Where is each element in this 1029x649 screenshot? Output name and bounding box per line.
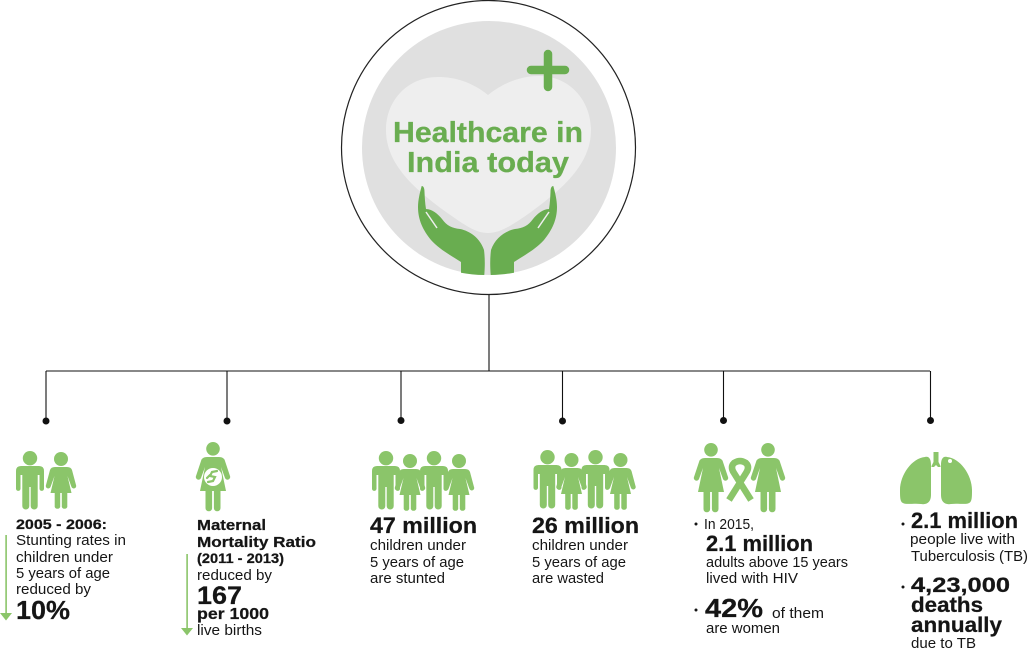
text: 26 million wasted [532,513,639,587]
icon: four children [372,451,474,511]
text: maternal mortality ratio: live births [197,623,262,639]
text: maternal mortality ratio: 167 [197,582,242,610]
text: 26 million wasted: 5 years of age [532,555,626,571]
panel: stunted children [370,451,477,587]
text: TB figures [902,508,1028,649]
text: stunting reduction: 10% [16,595,70,625]
text: 26 million wasted: 26 million [532,513,639,538]
title: India today [407,147,569,179]
text: stunting reduction: Stunting rates in [16,533,126,549]
text: HIV figures: 42% [705,593,763,623]
arrow: down [0,535,12,620]
emblem: Healthcare in India today [342,0,636,294]
text: 26 million wasted: are wasted [532,571,604,587]
text: TB figures: Tuberculosis (TB) [911,549,1028,565]
hand highlights [426,212,549,228]
text: stunting reduction: reduced by [16,582,92,598]
text: maternal mortality ratio: (2011 - 2013) [197,550,284,566]
text: TB figures: people live with [910,532,1015,548]
text: HIV figures: In 2015, [704,517,754,533]
grey disc [362,21,616,275]
icon: pregnant woman [196,442,230,511]
text: maternal mortality ratio: per 1000 [197,606,269,623]
text: TB figures: 2.1 million [911,508,1018,533]
text: stunting reduction [16,516,126,625]
text: 26 million wasted: children under [532,538,628,554]
text: 47 million stunted: children under [370,538,466,554]
text: 47 million stunted: 47 million [370,513,477,538]
text: HIV figures: adults above 15 years [706,555,848,571]
icon: plus [531,54,565,87]
icon: women with ribbon [694,443,785,512]
text: TB figures: 4,23,000 [911,574,1010,597]
text: HIV figures [694,517,848,637]
text: maternal mortality ratio: Mortality Ratio [197,534,316,551]
connector tree [42,295,934,424]
panel: stunting rates [0,451,126,625]
arrow: down [181,554,193,636]
icon: left hand [418,186,485,275]
heart [386,76,591,233]
text: TB figures: annually [911,614,1002,637]
icon: boy and girl [16,451,76,510]
text: TB figures: deaths [911,594,983,617]
text: stunting reduction: children under [16,550,113,566]
text: 47 million stunted [370,513,477,587]
text: stunting reduction: 5 years of age [16,566,110,582]
text: HIV figures: lived with HIV [706,571,798,587]
text: HIV figures: of them [772,606,824,622]
icon: four children [534,450,636,510]
text: maternal mortality ratio [197,517,316,639]
text: 47 million stunted: 5 years of age [370,555,464,571]
text: HIV figures: 2.1 million [706,531,813,556]
panel: wasted children [532,450,639,587]
text: stunting reduction: 2005 - 2006: [16,516,107,532]
panel: HIV [694,443,848,637]
panel: maternal mortality [181,442,316,639]
text: 47 million stunted: are stunted [370,571,445,587]
panel: tuberculosis [900,452,1028,649]
outer ring [342,0,636,294]
text: maternal mortality ratio: Maternal [197,517,266,534]
title [393,117,583,179]
icon: right hand [490,186,557,275]
icon: lungs [900,452,972,504]
title: Healthcare in [393,117,583,149]
text: maternal mortality ratio: reduced by [197,568,273,584]
text: HIV figures: are women [706,621,780,637]
